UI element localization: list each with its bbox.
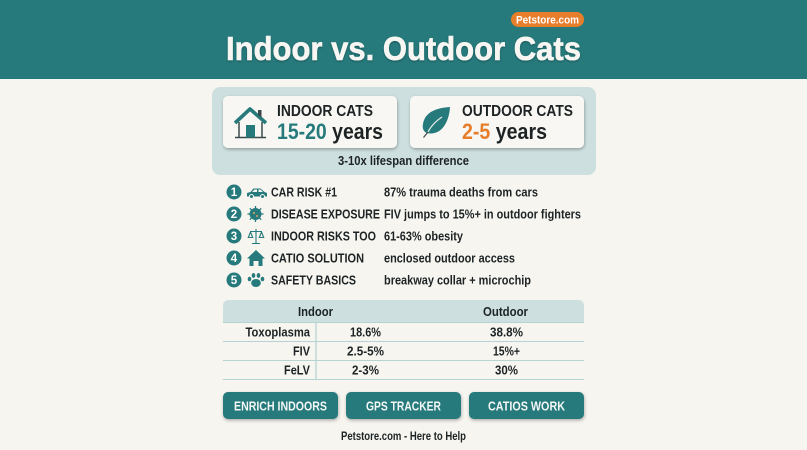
comparison table: 38.8%: [490, 324, 523, 340]
comparison table: 15%+: [493, 344, 520, 358]
row 3: indoor risks: 3: [231, 231, 237, 243]
outdoor lifespan: 2-5 years: [462, 119, 547, 144]
row 4: catio solution: enclosed outdoor access: [384, 250, 515, 266]
card: indoor cats: [223, 96, 397, 148]
comparison table: 30%: [495, 362, 518, 378]
row 5: safety basics: 5: [231, 275, 238, 287]
header banner: [0, 0, 807, 79]
comparison table: 2-3%: [352, 362, 379, 378]
button: enrich indoors: ENRICH INDOORS: [234, 400, 327, 414]
row 4: catio solution: [226, 250, 515, 266]
lifespan difference note: 3-10x lifespan difference: [338, 154, 469, 168]
button: catios work: CATIOS WORK: [488, 400, 565, 414]
row 5: safety basics: SAFETY BASICS: [271, 272, 356, 288]
title: Indoor vs. Outdoor Cats: [226, 30, 581, 67]
comparison table: Outdoor: [483, 304, 528, 319]
comparison table: FIV: [293, 344, 310, 358]
button: enrich indoors: [223, 392, 338, 419]
outdoor label: OUTDOOR CATS: [462, 103, 573, 120]
comparison table: [223, 300, 584, 380]
icon: house: [235, 109, 266, 138]
row 1: car risk: 87% trauma deaths from cars: [384, 184, 538, 200]
row 4: catio solution: 4: [231, 253, 238, 265]
icon: leaf: [423, 107, 450, 138]
comparison table: FeLV: [284, 362, 310, 378]
row 2: disease exposure: DISEASE EXPOSURE: [271, 206, 380, 222]
row 1: car risk: [226, 184, 538, 200]
footer: Petstore.com - Here to Help: [341, 431, 466, 443]
row 1: car risk: CAR RISK #1: [271, 184, 337, 200]
row 3: indoor risks: INDOOR RISKS TOO: [271, 228, 376, 244]
brand badge: Petstore.com: [516, 14, 579, 26]
row 2: disease exposure: 2: [231, 209, 237, 221]
row 3: indoor risks: 61-63% obesity: [384, 228, 464, 244]
card: outdoor cats: [410, 96, 584, 148]
row 3: indoor risks: [226, 228, 464, 244]
panel: lifespan comparison: [212, 87, 596, 175]
numbered risk list: [226, 184, 581, 288]
row 5: safety basics: breakway collar + microchip: [384, 272, 531, 288]
indoor label: INDOOR CATS: [277, 103, 373, 120]
comparison table: Toxoplasma: [246, 324, 311, 340]
row 4: catio solution: CATIO SOLUTION: [271, 250, 364, 266]
indoor lifespan: 15-20 years: [277, 119, 383, 144]
comparison table: 2.5-5%: [347, 344, 384, 358]
comparison table: Indoor: [298, 304, 333, 319]
comparison table: 18.6%: [350, 324, 381, 340]
button: catios work: [469, 392, 584, 419]
button: gps tracker: GPS TRACKER: [366, 400, 441, 414]
row 2: disease exposure: [226, 206, 581, 222]
row 5: safety basics: [226, 272, 531, 288]
row 2: disease exposure: FIV jumps to 15%+ in outdoor fighters: [384, 206, 581, 222]
button: gps tracker: [346, 392, 461, 419]
row 1: car risk: 1: [231, 187, 238, 199]
